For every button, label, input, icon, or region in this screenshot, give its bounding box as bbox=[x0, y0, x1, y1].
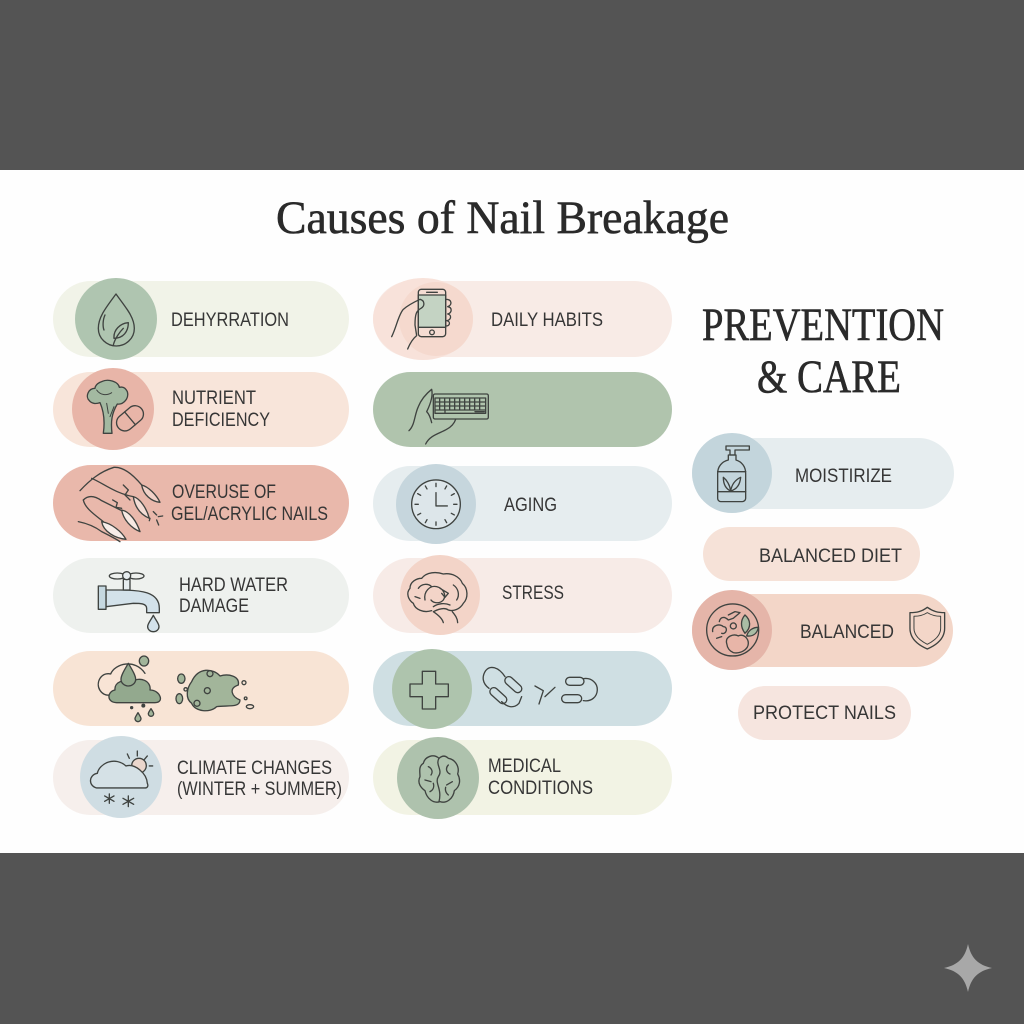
icon: pump bottle bbox=[718, 446, 749, 502]
icon: hand on keyboard bbox=[409, 389, 488, 444]
row: medical conditions: MEDICAL bbox=[488, 755, 561, 777]
icon: sparkle watermark bbox=[944, 944, 992, 992]
row: dehydration bbox=[53, 278, 349, 360]
row: overuse of gel nails bbox=[53, 465, 349, 542]
icon: medical cross bbox=[410, 671, 448, 709]
icon: brain top view bbox=[419, 756, 460, 802]
row: aging bbox=[373, 464, 672, 544]
icon: faucet bbox=[98, 572, 159, 632]
row: typing and keyboard bbox=[373, 372, 672, 447]
panel: causes column one bbox=[53, 278, 349, 818]
row: pollution and weather bbox=[53, 651, 349, 726]
row: climate changes: (WINTER + SUMMER) bbox=[177, 778, 342, 800]
icon: cracked acrylic nails bbox=[78, 467, 163, 542]
icon: cloud and blob bbox=[98, 656, 254, 722]
row: aging: AGING bbox=[504, 494, 557, 516]
pill: balanced diet bbox=[703, 527, 920, 581]
row: hard water damage bbox=[53, 558, 349, 633]
row: medical conditions bbox=[373, 737, 672, 819]
row: stress bbox=[373, 555, 672, 635]
row: medical conditions: CONDITIONS bbox=[488, 777, 593, 799]
row: overuse of gel nails: OVERUSE OF bbox=[172, 481, 276, 503]
panel: prevention and care bbox=[692, 299, 954, 740]
icon: brain side view bbox=[408, 573, 467, 623]
heading: prevention and care: & CARE bbox=[757, 351, 901, 403]
row: nutrient deficiency: DEFICIENCY bbox=[172, 409, 270, 431]
title: Causes of Nail Breakage bbox=[276, 192, 729, 244]
pill: protect nails bbox=[738, 686, 911, 740]
row: medical cross and chain bbox=[373, 649, 672, 729]
icon: broccoli and capsule bbox=[87, 380, 147, 434]
icon: cloud, sun and snow bbox=[90, 751, 153, 807]
row: daily habits: DAILY HABITS bbox=[491, 309, 603, 331]
row: nutrient deficiency: NUTRIENT bbox=[172, 387, 256, 409]
heading: prevention and care: PREVENTION bbox=[702, 299, 944, 351]
row: overuse of gel nails: GEL/ACRYLIC NAILS bbox=[171, 503, 328, 525]
pill: protect nails: PROTECT NAILS bbox=[753, 702, 896, 724]
row: hard water damage: HARD WATER bbox=[179, 574, 288, 596]
row: daily habits bbox=[373, 278, 672, 360]
row: climate changes: CLIMATE CHANGES bbox=[177, 757, 332, 779]
white content panel bbox=[0, 170, 1024, 853]
row: balanced bbox=[692, 590, 953, 670]
pill: balanced diet: BALANCED DIET bbox=[759, 545, 902, 567]
icon: broken chain bbox=[483, 667, 597, 707]
row: dehydration: DEHYRRATION bbox=[171, 309, 289, 331]
icon: hand holding phone bbox=[392, 289, 451, 349]
row: balanced: BALANCED bbox=[800, 621, 894, 643]
icon: water drop with leaf bbox=[98, 294, 134, 346]
icon: clock bbox=[412, 480, 460, 529]
row: nutrient deficiency bbox=[53, 368, 349, 450]
row: stress: STRESS bbox=[502, 582, 564, 604]
row: moisturize bbox=[692, 433, 954, 513]
heading: prevention and care bbox=[702, 299, 944, 403]
icon: shield bbox=[910, 607, 945, 649]
row: climate changes bbox=[53, 736, 349, 818]
panel: causes column two bbox=[373, 278, 672, 819]
icon: food plate bbox=[707, 604, 759, 656]
row: hard water damage: DAMAGE bbox=[179, 595, 249, 617]
row: moisturize: MOISTIRIZE bbox=[795, 465, 892, 487]
